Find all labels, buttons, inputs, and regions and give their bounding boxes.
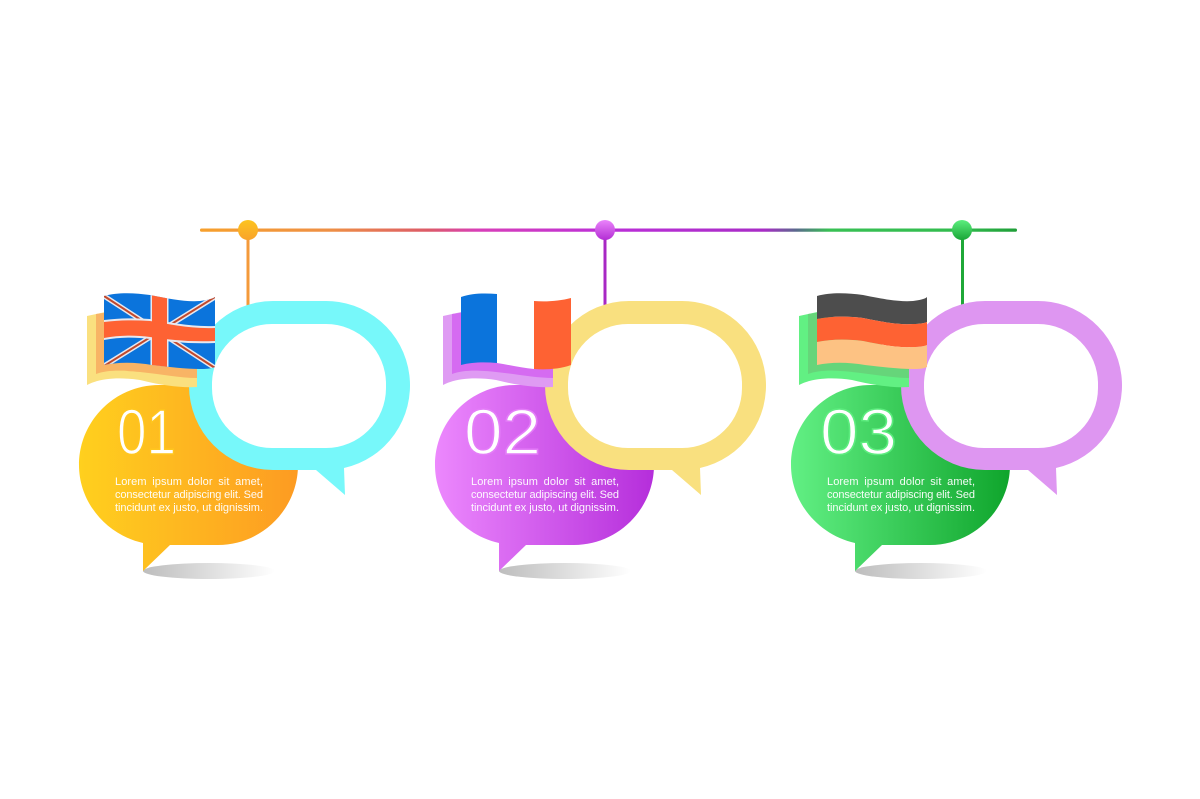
description 3: consectetur adipiscing elit. Sed bbox=[827, 489, 975, 501]
purple speech ring bbox=[901, 301, 1122, 495]
stem and node 1 bbox=[238, 220, 258, 306]
yellow text bubble bbox=[79, 385, 298, 571]
description 1: tincidunt ex justo, ut dignissim. bbox=[115, 502, 263, 514]
green text bubble bbox=[791, 385, 1010, 571]
cyan speech ring bbox=[189, 301, 410, 495]
description 3: Lorem ipsum dolor sit amet, bbox=[827, 476, 975, 488]
description 2: consectetur adipiscing elit. Sed bbox=[471, 489, 619, 501]
purple text bubble bbox=[435, 385, 654, 571]
shadow 3 bbox=[855, 563, 987, 579]
description 1: Lorem ipsum dolor sit amet, bbox=[115, 476, 263, 488]
step 1: United Kingdom bbox=[79, 220, 410, 579]
description 2: tincidunt ex justo, ut dignissim. bbox=[471, 502, 619, 514]
flag back pages 2 bbox=[443, 311, 553, 387]
flag back pages 1 bbox=[87, 311, 197, 387]
description 1: consectetur adipiscing elit. Sed bbox=[115, 489, 263, 501]
shadow 1 bbox=[143, 563, 275, 579]
yellow speech ring bbox=[545, 301, 766, 495]
stem and node 2 bbox=[595, 220, 615, 306]
description 2 bbox=[471, 476, 619, 514]
number 01: 01 bbox=[117, 396, 176, 468]
description 3 bbox=[827, 476, 975, 514]
step 3: Germany bbox=[791, 220, 1122, 579]
flag back pages 3 bbox=[799, 311, 909, 387]
step 2: France bbox=[435, 220, 766, 579]
description 1 bbox=[115, 476, 263, 514]
timeline connector line bbox=[200, 228, 1017, 232]
description 3: tincidunt ex justo, ut dignissim. bbox=[827, 502, 975, 514]
icon: French flag bbox=[461, 293, 571, 369]
number 02: 02 bbox=[464, 396, 541, 468]
icon: UK flag bbox=[104, 288, 215, 372]
number 03: 03 bbox=[820, 396, 897, 468]
icon: German flag bbox=[817, 293, 927, 369]
stem and node 3 bbox=[952, 220, 972, 306]
description 2: Lorem ipsum dolor sit amet, bbox=[471, 476, 619, 488]
shadow 2 bbox=[499, 563, 631, 579]
